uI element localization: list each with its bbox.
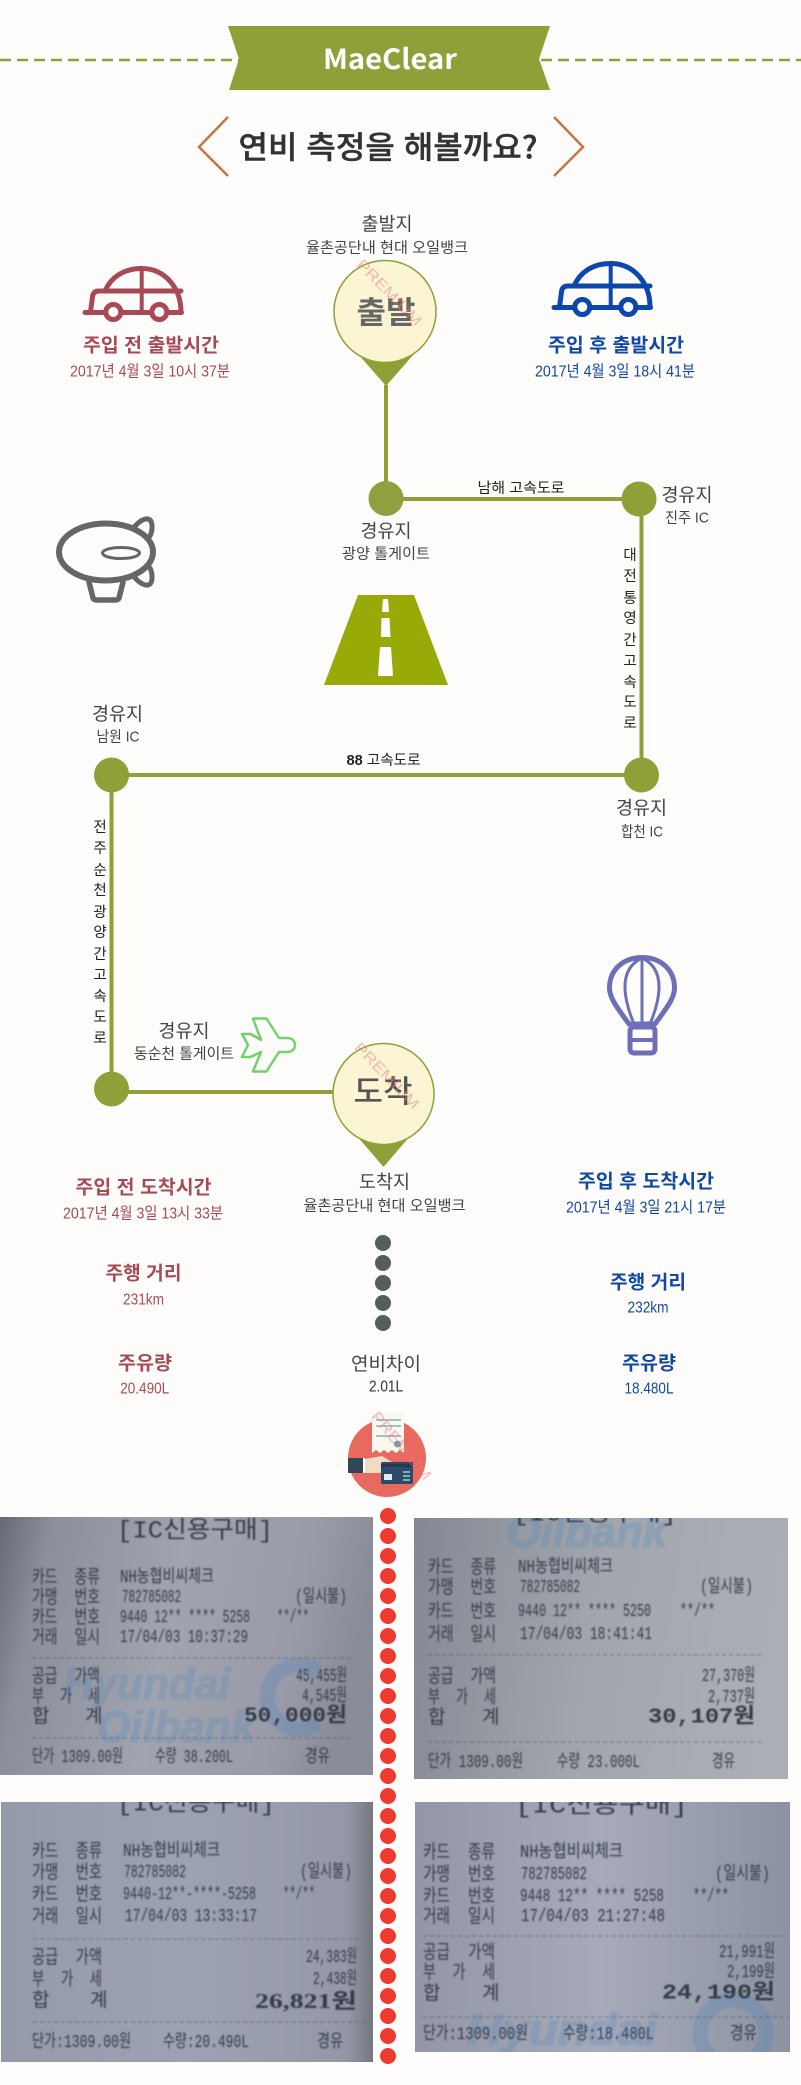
after: fuel: 18.480L	[624, 1380, 674, 1398]
receipt: after arrival: 카드 종류	[423, 1841, 495, 1864]
icon: road	[324, 595, 448, 685]
receipt: after departure: 거래 일시	[428, 1623, 496, 1646]
vertical label: 전주순천광양간고속도로	[93, 819, 107, 1047]
receipt: before departure: 가맹 번호	[32, 1586, 100, 1609]
receipt: before arrival: **/**	[283, 1885, 315, 1905]
receipt: after departure: 카드 번호	[428, 1600, 496, 1623]
receipt: before departure: 수량 38.200L	[155, 1746, 233, 1768]
receipt: before arrival: 17/04/03 13:33:17	[125, 1907, 257, 1927]
start pin: PREMIUM	[353, 256, 425, 330]
receipt: before arrival: 수량:20.490L	[163, 2031, 249, 2053]
receipt: after arrival: 24,190원	[662, 1980, 775, 2006]
receipt: after departure: 합	[428, 1706, 445, 1729]
label: 남해 고속도로: 남해 고속도로	[478, 480, 564, 497]
receipt: before departure: 45,455원	[296, 1665, 347, 1687]
receipt: after arrival: 17/04/03 21:27:48	[521, 1907, 665, 1927]
vertical label: 대전통영간고속도로: 고	[623, 654, 637, 670]
receipt: before departure: [IC신용구매]	[117, 1516, 273, 1546]
node: 진주 IC: 진주 IC	[665, 510, 709, 526]
receipt: after departure: 단가 1309.00원	[428, 1751, 523, 1773]
node: 광양 톨게이트: 경유지	[360, 520, 412, 542]
receipt: after departure: 782785082	[520, 1578, 580, 1598]
receipt: after arrival: 부 가 세	[423, 1961, 495, 1984]
receipt: before departure: Oilbank	[97, 1702, 257, 1752]
receipt: after departure: 가맹 번호	[428, 1576, 496, 1599]
receipt: before departure: 9440 12** **** 5258	[120, 1608, 250, 1628]
after: fuel	[622, 1352, 676, 1398]
receipt: before departure: Hyundai	[63, 1660, 231, 1708]
node: 동순천 톨게이트	[94, 1020, 234, 1106]
icon: hot air balloon	[610, 958, 674, 1053]
fuel difference	[351, 1354, 421, 1396]
vertical label: 대전통영간고속도로: 영	[623, 610, 637, 627]
receipt: after arrival: 거래 일시	[423, 1905, 495, 1928]
receipt: before arrival: 24,383원	[306, 1946, 357, 1968]
vertical label: 전주순천광양간고속도로: 양	[93, 924, 107, 941]
receipt: after arrival: 경유	[730, 2023, 757, 2045]
receipt: before departure: **/**	[277, 1608, 309, 1628]
node: 진주 IC: 경유지	[662, 484, 712, 506]
receipt: after departure: 부 가 세	[428, 1686, 496, 1709]
after: fuel: 주유량	[622, 1352, 676, 1374]
route lines	[112, 385, 642, 1092]
receipt: before arrival: 카드 번호	[32, 1883, 102, 1906]
receipt: after departure: Oilbank	[507, 1508, 670, 1556]
after: distance: 232km	[628, 1300, 668, 1316]
receipt: before arrival: 782785082	[124, 1863, 186, 1883]
receipt: before arrival: 가맹 번호	[32, 1861, 102, 1884]
receipt: after departure: 수량 23.000L	[557, 1751, 640, 1773]
node: 광양 톨게이트: 광양 톨게이트	[342, 546, 430, 562]
arrival pin: 도착	[354, 1074, 412, 1110]
vertical label: 대전통영간고속도로: 간	[623, 632, 637, 649]
vertical label: 전주순천광양간고속도로: 주	[93, 841, 107, 857]
receipt: before departure: 50,000원	[244, 1704, 347, 1728]
vertical label: 전주순천광양간고속도로: 고	[93, 968, 107, 984]
dots connector	[375, 1235, 391, 1331]
arrival label: 율촌공단내 현대 오일뱅크	[304, 1198, 466, 1214]
before: departure time: 2017년 4월 3일 10시 37분	[70, 362, 230, 380]
icon: receipt and card payment	[348, 1408, 435, 1497]
receipt: before departure: 4,545원	[302, 1685, 347, 1707]
dashed header line	[0, 59, 801, 61]
receipt: after departure: 27,370원	[702, 1665, 755, 1687]
arrival label: 도착지	[359, 1172, 410, 1192]
arrival pin: PREMIUM	[351, 1039, 422, 1113]
receipt: after arrival: Hyundai	[467, 2006, 658, 2054]
receipt: after departure	[414, 1500, 788, 1779]
receipt: after arrival: 9448 12** **** 5258	[520, 1887, 664, 1907]
before: fuel	[118, 1352, 172, 1398]
before: departure time: 주입 전 출발시간	[83, 334, 219, 356]
receipt: before arrival: 2,438원	[313, 1968, 357, 1990]
receipt: before arrival: 경유	[317, 2031, 343, 2053]
receipt: after departure: 2,737원	[708, 1686, 755, 1708]
vertical label: 대전통영간고속도로: 전	[623, 568, 637, 585]
node: 동순천 톨게이트: 경유지	[158, 1020, 210, 1042]
after: arrival time	[566, 1170, 726, 1216]
receipt: before departure: 카드 번호	[32, 1606, 100, 1629]
receipt: before departure: 단가 1309.00원	[32, 1746, 123, 1768]
node: 남원 IC	[92, 704, 143, 792]
vertical label: 대전통영간고속도로: 대	[623, 547, 637, 564]
after: departure time: 2017년 4월 3일 18시 41분	[535, 362, 695, 380]
receipt: before arrival: 공급 가액	[32, 1946, 102, 1969]
vertical label: 대전통영간고속도로: 통	[623, 591, 637, 607]
node: 합천 IC: 경유지	[616, 798, 667, 818]
banner: MaeClear	[228, 26, 550, 90]
receipt: before departure: 거래 일시	[32, 1626, 100, 1649]
receipt: after arrival	[415, 1792, 790, 2066]
start pin	[334, 256, 436, 386]
node: 진주 IC	[622, 482, 712, 526]
receipt: before arrival: [IC신용구매]	[117, 1790, 275, 1818]
receipt: after arrival: NH농협비씨체크	[520, 1841, 623, 1863]
fuel difference: 연비차이	[351, 1354, 421, 1374]
receipt: after arrival: (일시불)	[715, 1863, 770, 1885]
receipt: before arrival: 거래 일시	[32, 1905, 102, 1928]
icon: receipt and card payment: PREMIUM	[367, 1408, 435, 1484]
arrival pin	[333, 1039, 434, 1167]
receipt: before arrival: NH농협비씨체크	[123, 1840, 220, 1862]
before: arrival time	[63, 1176, 223, 1222]
receipt: after arrival: 수량:18.480L	[563, 2023, 654, 2045]
icon: airplane	[242, 1018, 295, 1072]
start pin: 출발	[356, 296, 416, 330]
receipt: before arrival: 단가:1309.00원	[32, 2031, 131, 2053]
title with chevrons	[199, 117, 583, 176]
departure label: 율촌공단내 현대 오일뱅크	[306, 240, 468, 256]
receipt: after departure: 카드 종류	[428, 1556, 496, 1579]
before: fuel: 20.490L	[120, 1380, 169, 1398]
before: fuel: 주유량	[118, 1352, 172, 1374]
receipt: after arrival: 가맹 번호	[423, 1863, 495, 1886]
node: 합천 IC	[616, 758, 667, 840]
vertical label: 전주순천광양간고속도로: 로	[93, 1031, 107, 1047]
before: distance: 주행 거리	[106, 1262, 182, 1284]
vertical label: 전주순천광양간고속도로: 광	[93, 904, 107, 921]
arrival label	[304, 1172, 466, 1214]
receipt: before departure: NH농협비씨체크	[120, 1566, 214, 1588]
title with chevrons: 연비 측정을 해볼까요?	[238, 122, 538, 168]
icon: blue car	[554, 263, 650, 314]
receipt: before departure: 17/04/03 10:37:29	[120, 1628, 248, 1648]
receipt: after arrival: [IC신용구매]	[515, 1792, 688, 1820]
node: 합천 IC: 합천 IC	[621, 824, 663, 840]
vertical label: 전주순천광양간고속도로: 천	[93, 882, 107, 899]
before: distance: 231km	[123, 1292, 164, 1308]
before: arrival time: 주입 전 도착시간	[76, 1176, 212, 1198]
receipt: before arrival: 부 가 세	[32, 1968, 102, 1991]
receipt: after arrival: 2,199원	[727, 1961, 775, 1983]
after: departure time	[535, 334, 695, 380]
departure label: 출발지	[362, 214, 412, 234]
receipt: after departure: 계	[482, 1706, 499, 1729]
receipt: before departure: 합	[32, 1705, 49, 1728]
receipt: after arrival: 782785082	[521, 1865, 587, 1885]
receipt: before arrival	[1, 1790, 373, 2062]
node: 광양 톨게이트	[342, 481, 430, 562]
receipt: after arrival: 단가:1309.00원	[423, 2023, 528, 2045]
receipt: after departure: NH농협비씨체크	[518, 1556, 613, 1578]
after: distance: 주행 거리	[610, 1272, 686, 1294]
receipt: before departure: 공급 가액	[32, 1665, 100, 1688]
departure label	[306, 214, 468, 256]
receipt: after departure: (일시불)	[700, 1576, 753, 1598]
receipt: before departure: 경유	[305, 1746, 330, 1768]
vertical label: 전주순천광양간고속도로: 도	[93, 1010, 107, 1026]
vertical label: 대전통영간고속도로: 로	[623, 716, 637, 732]
icon: blimp	[59, 519, 153, 600]
receipt: before departure: 782785082	[122, 1588, 181, 1608]
vertical label: 대전통영간고속도로	[623, 547, 637, 732]
vertical label: 전주순천광양간고속도로: 간	[93, 946, 107, 963]
receipt: after departure: 경유	[712, 1751, 735, 1773]
vertical label: 대전통영간고속도로: 속	[623, 674, 637, 691]
vertical label: 전주순천광양간고속도로: 순	[93, 862, 107, 879]
receipt: before arrival: 26,821원	[255, 1989, 357, 2013]
vertical label: 전주순천광양간고속도로: 전	[93, 819, 107, 836]
node: 남원 IC: 경유지	[92, 704, 143, 724]
receipt: after departure: **/**	[680, 1602, 715, 1622]
label: 88 고속도로: 88 고속도로	[346, 752, 420, 769]
after: distance	[610, 1272, 686, 1316]
receipt: after departure: 30,107원	[648, 1704, 755, 1730]
receipt: before arrival: 합	[32, 1989, 49, 2012]
receipt: before arrival: 계	[90, 1989, 107, 2012]
before: distance	[106, 1262, 182, 1308]
receipt: before arrival: 카드 종류	[32, 1840, 102, 1863]
before: departure time	[70, 334, 230, 380]
receipt: after departure: 9440 12** **** 5250	[518, 1602, 651, 1622]
receipt: before departure: 계	[85, 1705, 102, 1728]
receipt: after arrival: 공급 가액	[423, 1941, 495, 1964]
receipt: after departure: [IC신용구매]	[513, 1500, 677, 1528]
vertical label: 대전통영간고속도로: 도	[623, 695, 637, 711]
receipt: after arrival: 카드 번호	[423, 1885, 495, 1908]
node: 남원 IC: 남원 IC	[96, 728, 140, 746]
node: 동순천 톨게이트: 동순천 톨게이트	[134, 1046, 234, 1062]
receipt: after arrival: 합	[423, 1982, 440, 2005]
after: arrival time: 2017년 4월 3일 21시 17분	[566, 1198, 726, 1216]
before: arrival time: 2017년 4월 3일 13시 33분	[63, 1204, 223, 1222]
receipt: after departure: 공급 가액	[428, 1665, 496, 1688]
vertical label: 전주순천광양간고속도로: 속	[93, 988, 107, 1005]
receipt: before arrival: 9440-12**-****-5258	[123, 1885, 256, 1905]
receipt: after arrival: 21,991원	[719, 1941, 775, 1963]
receipt: after arrival: 계	[482, 1982, 499, 2005]
banner: MaeClear: MaeClear	[323, 38, 458, 78]
after: arrival time: 주입 후 도착시간	[578, 1170, 714, 1192]
receipt: before arrival: (일시불)	[300, 1861, 352, 1883]
receipt: before departure: 부 가 세	[32, 1685, 100, 1708]
receipt: after departure: 17/04/03 18:41:41	[520, 1625, 652, 1645]
receipt: before departure	[0, 1516, 373, 1775]
receipt: before departure: 카드 종류	[32, 1566, 100, 1589]
receipt: before departure: (일시불)	[295, 1586, 347, 1608]
dotted red vertical line	[380, 1508, 396, 2064]
receipt: after arrival: **/**	[693, 1887, 729, 1907]
after: departure time: 주입 후 출발시간	[548, 334, 684, 356]
fuel difference: 2.01L	[369, 1378, 403, 1396]
icon: red car	[85, 268, 182, 320]
